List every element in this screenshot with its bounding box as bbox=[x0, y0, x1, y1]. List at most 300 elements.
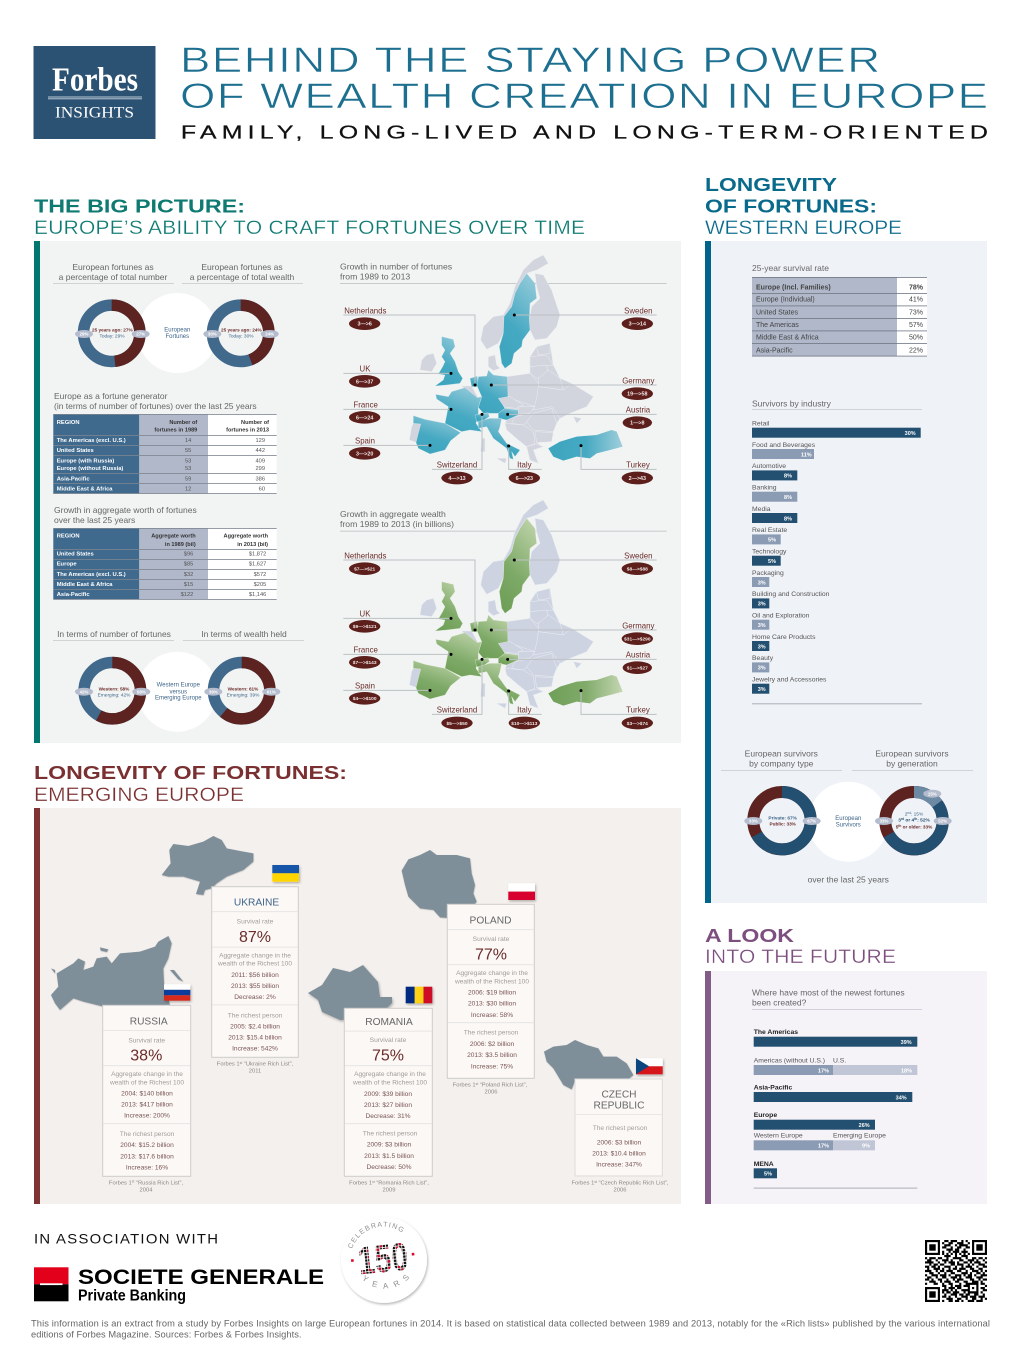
badge: celebrating 150 years: 150 bbox=[356, 1235, 410, 1283]
table: survival rate: 25-year survival rate bbox=[752, 263, 829, 273]
card: Romania: Survival rate bbox=[370, 1037, 407, 1044]
heading: a look into the future: A LOOK bbox=[705, 925, 795, 946]
map: growth in aggregate wealth: UK bbox=[360, 609, 371, 618]
table: fortune generator: 442 bbox=[256, 448, 265, 454]
map: growth in number of fortunes bbox=[340, 255, 667, 484]
badge: celebrating 150 years: YEARS bbox=[364, 1274, 409, 1289]
donut pair: Western vs Emerging: 39% bbox=[209, 689, 218, 694]
card: Poland: 2006: $19 billion bbox=[468, 990, 516, 997]
footer note bbox=[31, 1319, 990, 1340]
donut pair: European fortunes: 30% bbox=[208, 332, 217, 337]
card: Russia bbox=[103, 1005, 191, 1176]
donut pair: survivors: rd bbox=[901, 817, 904, 821]
map: growth in number of fortunes: UK bbox=[360, 364, 371, 373]
map: growth in aggregate wealth: from 1989 to 2013 (in billions) bbox=[340, 519, 454, 529]
bar chart: newest fortunes: been created? bbox=[752, 998, 807, 1008]
donut headings: European fortunes: a percentage of total number bbox=[59, 272, 168, 282]
bar chart: survivors by industry: 5% bbox=[768, 559, 776, 565]
flag: Romania bbox=[406, 987, 432, 1003]
logo: Forbes Insights: Forbes bbox=[52, 62, 138, 98]
bar chart: newest fortunes bbox=[752, 988, 922, 1189]
map: growth in number of fortunes: Sweden bbox=[624, 306, 652, 315]
map: growth in aggregate wealth: $7—>$21 bbox=[354, 566, 376, 572]
map: growth in aggregate wealth: $4—>$100 bbox=[353, 696, 377, 702]
donut headings: survivors: European survivors bbox=[745, 748, 818, 758]
map: Russia bbox=[51, 936, 183, 1010]
note: over the last 25 years: over the last 25 years bbox=[808, 874, 889, 884]
map: growth in number of fortunes: Germany bbox=[622, 376, 655, 385]
donut pair: survivors: 33% bbox=[749, 819, 758, 824]
bar chart: survivors by industry: 3% bbox=[758, 687, 766, 693]
heading: the big picture bbox=[34, 196, 585, 239]
label: in association with: IN ASSOCIATION WITH bbox=[34, 1232, 218, 1247]
table: fortune generator: 14 bbox=[185, 438, 191, 444]
card: Romania: The richest person bbox=[363, 1131, 418, 1138]
table: aggregate worth: Aggregate worth bbox=[224, 534, 269, 540]
donut pair: Western vs Emerging: 61% bbox=[267, 689, 276, 694]
table: aggregate worth: United States bbox=[57, 552, 94, 558]
table: fortune generator: Asia-Pacific bbox=[57, 476, 90, 482]
donut pair: survivors: 5 bbox=[896, 824, 898, 829]
map: growth in number of fortunes: France bbox=[353, 400, 378, 409]
map: growth in aggregate wealth: $5—>$50 bbox=[446, 721, 468, 727]
heading: aggregate worth: over the last 25 years bbox=[54, 515, 135, 525]
donut pair: survivors: nd bbox=[907, 811, 911, 815]
table: aggregate worth: Europe bbox=[57, 562, 77, 568]
bar chart: survivors by industry: Technology bbox=[752, 548, 787, 556]
donut pair: European fortunes: 29% bbox=[80, 332, 88, 337]
donut pair: survivors: Public: 33% bbox=[770, 822, 797, 827]
heading: aggregate worth bbox=[54, 505, 197, 525]
source: Russia: “Russia Rich List”, bbox=[134, 1180, 183, 1186]
bar chart: newest fortunes: 17% bbox=[818, 1068, 829, 1074]
table: fortune generator: Middle East & Africa bbox=[57, 486, 113, 492]
country: Russia bbox=[51, 936, 191, 1193]
donut pair: European fortunes: 25 years ago: 27% bbox=[92, 327, 133, 332]
card: Ukraine: Survival rate bbox=[237, 919, 274, 926]
map: growth in number of fortunes: 6—>23 bbox=[516, 476, 533, 482]
footer note: This information is an extract from a study by Forbes Insights on large European fortunes in 2014. It is based on statistical data collected between 1989 and 2013, notably for the «Rich lists» published by the various international bbox=[31, 1319, 990, 1329]
map: growth in aggregate wealth bbox=[340, 500, 667, 729]
footer note: editions of Forbes Magazine. Sources: Forbes & Forbes Insights. bbox=[31, 1330, 302, 1340]
logo: Forbes Insights bbox=[34, 46, 156, 139]
donut pair: Western vs Emerging: Emerging: 39% bbox=[227, 692, 260, 698]
table: fortune generator: 129 bbox=[256, 438, 265, 444]
table: fortune generator bbox=[53, 414, 277, 494]
table: fortune generator: 409 bbox=[256, 458, 265, 464]
card: Russia: Aggregate change in the bbox=[111, 1071, 183, 1078]
map: growth in aggregate wealth: Italy bbox=[517, 706, 532, 715]
table: aggregate worth bbox=[53, 528, 277, 600]
table: aggregate worth: in 1989 (bil) bbox=[165, 542, 196, 548]
table: fortune generator: fortunes in 2013 bbox=[226, 428, 269, 434]
table: aggregate worth: $1,872 bbox=[249, 552, 266, 558]
source: Russia: 2004 bbox=[140, 1187, 153, 1193]
donut headings: survivors bbox=[721, 748, 973, 771]
bar chart: survivors by industry: 3% bbox=[758, 602, 766, 608]
card: Poland: Survival rate bbox=[473, 936, 510, 943]
map: growth in aggregate wealth: Switzerland bbox=[437, 706, 477, 715]
map: growth in number of fortunes: Growth in number of fortunes bbox=[340, 261, 453, 271]
donut pair: Western vs Emerging: 42% bbox=[80, 689, 88, 694]
table: aggregate worth: $205 bbox=[254, 582, 266, 588]
heading: aggregate worth: Growth in aggregate worth of fortunes bbox=[54, 505, 197, 515]
card: Ukraine: 2013: $15.4 billion bbox=[228, 1035, 282, 1042]
source: Czech Republic: st bbox=[594, 1180, 597, 1184]
bar chart: newest fortunes: Americas (without U.S.) bbox=[754, 1057, 825, 1064]
card: Russia: 2004: $140 billion bbox=[121, 1091, 173, 1098]
card: Poland: Aggregate change in the bbox=[456, 970, 528, 977]
donut headings: survivors: by company type bbox=[749, 758, 814, 768]
donut headings: European fortunes: European fortunes as bbox=[201, 262, 283, 272]
heading: the big picture: EUROPE’S ABILITY TO CRAFT FORTUNES OVER TIME bbox=[34, 218, 585, 239]
bar chart: survivors by industry bbox=[752, 398, 922, 704]
map: growth in number of fortunes: 6—>37 bbox=[356, 379, 373, 385]
card: Ukraine: Decrease: 2% bbox=[234, 994, 276, 1001]
donut pair: survivors: 3 bbox=[898, 819, 901, 824]
source: Romania: st bbox=[372, 1180, 375, 1184]
table: aggregate worth: in 2013 (bil) bbox=[237, 542, 268, 548]
donut pair: survivors: th bbox=[898, 824, 901, 828]
table: survival rate: 73% bbox=[909, 309, 923, 316]
map: Romania bbox=[308, 965, 392, 1020]
table: aggregate worth: $32 bbox=[184, 572, 193, 578]
card: Ukraine: The richest person bbox=[228, 1012, 283, 1019]
bar chart: newest fortunes: 5% bbox=[764, 1172, 772, 1178]
card: Russia: wealth of the Richest 100 bbox=[109, 1079, 184, 1086]
country: Czech Republic bbox=[544, 1040, 669, 1194]
source: Ukraine: Forbes 1 bbox=[217, 1062, 240, 1068]
source: Czech Republic: “Czech Republic Rich List”, bbox=[597, 1181, 669, 1187]
card: Romania: 2013: $27 billion bbox=[364, 1102, 412, 1109]
heading: the big picture: THE BIG PICTURE: bbox=[34, 196, 245, 216]
card: Romania: Aggregate change in the bbox=[354, 1071, 426, 1078]
map: growth in number of fortunes: Netherlands bbox=[344, 306, 387, 315]
donut pair: Western vs Emerging: Emerging Europe bbox=[155, 695, 202, 701]
table: aggregate worth: Asia-Pacific bbox=[57, 592, 90, 598]
donut pair: European fortunes: 27% bbox=[136, 332, 145, 337]
bar chart: survivors by industry: Beauty bbox=[752, 655, 774, 662]
card: Russia: 38% bbox=[130, 1048, 162, 1065]
bar chart: newest fortunes: Where have most of the newest fortunes bbox=[752, 988, 905, 998]
card: Czech Republic: The richest person bbox=[593, 1125, 648, 1132]
map: growth in number of fortunes: Austria bbox=[626, 406, 651, 415]
map: Czech Republic bbox=[544, 1040, 633, 1089]
card: Russia: Increase: 16% bbox=[126, 1164, 168, 1171]
bar chart: survivors by industry: 5% bbox=[768, 538, 776, 544]
map: growth in aggregate wealth: $8—>$88 bbox=[627, 566, 648, 572]
table: fortune generator: 53 bbox=[185, 458, 191, 464]
map: growth in aggregate wealth: $7—>$143 bbox=[353, 660, 377, 666]
card: Romania: Decrease: 50% bbox=[366, 1164, 412, 1171]
card: Poland: 2006: $2 billion bbox=[470, 1041, 515, 1048]
table: aggregate worth: $572 bbox=[254, 572, 266, 578]
donut pair: survivors: Private: 67% bbox=[768, 815, 798, 821]
table: fortune generator: The Americas (excl. U.S.) bbox=[57, 438, 126, 444]
card: Russia: 2004: $15.2 billion bbox=[120, 1142, 174, 1149]
table: aggregate worth: $1,627 bbox=[249, 562, 266, 568]
bar chart: survivors by industry: Media bbox=[752, 506, 771, 513]
donut pair: survivors: 52% bbox=[938, 819, 947, 824]
donut pair: Western vs Emerging: 58% bbox=[137, 689, 146, 694]
table: aggregate worth: Middle East & Africa bbox=[57, 582, 113, 588]
table: fortune generator: United States bbox=[57, 448, 94, 454]
table: aggregate worth: $1,146 bbox=[249, 592, 266, 598]
source: Ukraine: st bbox=[240, 1061, 242, 1065]
table: aggregate worth: $15 bbox=[184, 582, 193, 588]
table: fortune generator: 299 bbox=[256, 466, 265, 472]
card: Poland: The richest person bbox=[464, 1030, 519, 1037]
card: Poland: Increase: 58% bbox=[471, 1012, 513, 1019]
map: growth in number of fortunes: 4—>13 bbox=[448, 476, 466, 482]
source: Romania: Forbes 1 bbox=[349, 1181, 372, 1187]
country: Poland bbox=[402, 850, 535, 1096]
donut pair: survivors: or 4 bbox=[904, 818, 915, 824]
table: fortune generator: 386 bbox=[256, 476, 265, 482]
card: Poland: 77% bbox=[475, 946, 507, 964]
bar chart: survivors by industry: 8% bbox=[784, 516, 792, 522]
bar chart: survivors by industry: 11% bbox=[801, 452, 812, 458]
table: survival rate: Europe (Individual) bbox=[756, 297, 815, 304]
heading: a look into the future bbox=[705, 925, 896, 968]
card: Romania: 2009: $39 billion bbox=[364, 1091, 412, 1098]
table: survival rate: Europe (Incl. Families) bbox=[756, 284, 831, 291]
source: Ukraine: 2011 bbox=[249, 1069, 261, 1075]
card: Czech Republic: 2013: $10.4 billion bbox=[592, 1150, 646, 1157]
card: Romania: wealth of the Richest 100 bbox=[352, 1079, 427, 1086]
donut pair: European fortunes bbox=[75, 293, 279, 373]
card: Czech Republic: Increase: 347% bbox=[596, 1162, 642, 1169]
table: fortune generator: 60 bbox=[259, 486, 265, 492]
bar chart: survivors by industry: Jewelry and Accessories bbox=[752, 676, 827, 684]
bar chart: survivors by industry: Home Care Products bbox=[752, 634, 816, 641]
heading: longevity emerging Europe bbox=[34, 762, 347, 806]
bar chart: newest fortunes: 26% bbox=[859, 1123, 870, 1129]
map: growth in number of fortunes: 6—>24 bbox=[356, 415, 373, 421]
donut pair: survivors: th bbox=[914, 817, 917, 821]
map: growth in number of fortunes: 19—>58 bbox=[627, 392, 648, 398]
panel: a look into the future bbox=[705, 971, 987, 1204]
table: fortune generator: REGION bbox=[57, 420, 80, 426]
source: Poland: st bbox=[476, 1082, 478, 1086]
donut pair: European fortunes: Today: 30% bbox=[228, 333, 254, 339]
bar chart: survivors by industry: Real Estate bbox=[752, 527, 787, 534]
bar chart: newest fortunes: 17% bbox=[818, 1144, 829, 1150]
table: fortune generator: Europe (without Russia) bbox=[57, 466, 123, 472]
map: Poland bbox=[402, 850, 477, 918]
donut pair: European fortunes: 25 years ago: 24% bbox=[221, 327, 262, 332]
source: Poland: “Poland Rich List”, bbox=[478, 1083, 528, 1089]
map: growth in aggregate wealth: Germany bbox=[622, 621, 655, 630]
donut headings: European fortunes: a percentage of total wealth bbox=[190, 272, 294, 282]
table: fortune generator: Europe (with Russia) bbox=[57, 458, 114, 464]
map: growth in aggregate wealth: Turkey bbox=[626, 706, 650, 715]
map: growth in number of fortunes: 1—>8 bbox=[630, 421, 645, 427]
donut pair: Western vs Emerging: Western: 61% bbox=[228, 686, 259, 691]
bar chart: survivors by industry: 3% bbox=[758, 644, 766, 650]
bar chart: newest fortunes: 9% bbox=[862, 1144, 870, 1150]
donut pair: survivors: 15% bbox=[928, 791, 937, 796]
table: fortune generator: Number of bbox=[169, 420, 197, 426]
table: survival rate bbox=[752, 263, 927, 356]
bar chart: survivors by industry: 3% bbox=[758, 666, 766, 672]
card: Romania: 2009: $3 billion bbox=[367, 1142, 412, 1149]
table: aggregate worth: The Americas (excl. U.S.) bbox=[57, 572, 126, 578]
table: survival rate: 78% bbox=[909, 284, 924, 291]
bar chart: newest fortunes: The Americas bbox=[754, 1029, 798, 1036]
map: Ukraine bbox=[162, 836, 253, 895]
card: Russia: 2013: $17.6 billion bbox=[120, 1153, 174, 1160]
card: Russia: Increase: 200% bbox=[124, 1113, 170, 1120]
card: Ukraine: 87% bbox=[239, 929, 271, 946]
panel: longevity western Europe bbox=[705, 241, 987, 903]
logo: Societe Generale: Private Banking bbox=[78, 1288, 186, 1304]
bar chart: newest fortunes: 18% bbox=[901, 1068, 912, 1074]
card: Romania: 75% bbox=[372, 1048, 404, 1064]
donut pair: survivors: European bbox=[835, 816, 861, 822]
table: survival rate: 50% bbox=[909, 335, 923, 342]
logo: Societe Generale: SOCIETE GENERALE bbox=[78, 1266, 324, 1289]
bar chart: newest fortunes: 34% bbox=[896, 1095, 907, 1101]
card: Ukraine: UKRAINE bbox=[234, 898, 279, 909]
card: Ukraine: Aggregate change in the bbox=[219, 952, 291, 959]
donut pair: Western vs Emerging: versus bbox=[169, 689, 187, 695]
table: fortune generator: 59 bbox=[185, 476, 191, 482]
bar chart: survivors by industry: Building and Construction bbox=[752, 591, 830, 598]
badge: celebrating 150 years bbox=[340, 1220, 430, 1306]
bar chart: newest fortunes: Asia-Pacific bbox=[754, 1084, 792, 1091]
donut pair: survivors: Survivors bbox=[836, 822, 861, 828]
country: Ukraine bbox=[162, 836, 299, 1075]
map: growth in number of fortunes: 2—>43 bbox=[629, 476, 646, 482]
bar chart: survivors by industry: 8% bbox=[784, 474, 792, 480]
donut pair: survivors: 33% bbox=[880, 819, 888, 824]
table: survival rate: United States bbox=[756, 309, 799, 316]
table: aggregate worth: REGION bbox=[57, 534, 80, 540]
card: Poland: 2013: $30 billion bbox=[468, 1001, 516, 1008]
bar chart: survivors by industry: Packaging bbox=[752, 570, 784, 577]
donut headings: European fortunes bbox=[53, 262, 303, 284]
donut headings: Western vs Emerging bbox=[53, 629, 304, 641]
card: Czech Republic: CZECH bbox=[601, 1090, 637, 1101]
source: Russia: Forbes 1 bbox=[109, 1180, 132, 1186]
bar chart: newest fortunes: MENA bbox=[754, 1161, 774, 1168]
map: growth in aggregate wealth: Growth in aggregate wealth bbox=[340, 509, 446, 519]
card: Ukraine bbox=[212, 887, 298, 1057]
map: growth in aggregate wealth: Spain bbox=[355, 681, 375, 690]
source: Russia: st bbox=[132, 1180, 134, 1184]
card: Romania: Decrease: 31% bbox=[365, 1113, 411, 1120]
table: survival rate: 57% bbox=[909, 322, 923, 329]
table: survival rate: Middle East & Africa bbox=[756, 335, 819, 342]
source: Ukraine: “Ukraine Rich List”, bbox=[242, 1062, 294, 1068]
donut headings: survivors: by generation bbox=[886, 758, 938, 768]
flag: Russia bbox=[164, 984, 190, 1001]
donut pair: Western vs Emerging: Western: 58% bbox=[99, 686, 130, 691]
card: Russia: The richest person bbox=[120, 1131, 175, 1138]
card: Russia: 2013: $417 billion bbox=[121, 1102, 173, 1109]
donut headings: European fortunes: European fortunes as bbox=[72, 262, 154, 272]
bar chart: newest fortunes: U.S. bbox=[833, 1057, 846, 1064]
title bbox=[180, 40, 988, 116]
donut pair: survivors: 2 bbox=[905, 813, 907, 818]
flag: Ukraine bbox=[272, 865, 299, 882]
bar chart: survivors by industry: 3% bbox=[758, 623, 766, 629]
donut headings: Western vs Emerging: In terms of wealth held bbox=[201, 629, 287, 639]
heading: fortune generator: Europe as a fortune generator bbox=[54, 391, 168, 401]
icon: QR code bbox=[925, 1241, 987, 1301]
map: growth in aggregate wealth: $3—>$74 bbox=[627, 721, 648, 727]
bar chart: survivors by industry: Banking bbox=[752, 484, 777, 492]
card: Russia: RUSSIA bbox=[130, 1016, 168, 1027]
heading: longevity western Europe: WESTERN EUROPE bbox=[705, 218, 902, 239]
heading: longevity western Europe: OF FORTUNES: bbox=[705, 196, 877, 216]
badge: celebrating 150 years: 150 bbox=[356, 1235, 410, 1283]
card: Romania bbox=[344, 1008, 432, 1176]
card: Czech Republic: REPUBLIC bbox=[594, 1100, 644, 1111]
map: growth in aggregate wealth: $1—>$27 bbox=[627, 665, 648, 671]
card: Poland: wealth of the Richest 100 bbox=[454, 978, 529, 985]
card: Ukraine: 2005: $2.4 billion bbox=[230, 1023, 280, 1030]
map: growth in number of fortunes: Italy bbox=[517, 461, 532, 470]
donut pair: survivors: : 52% bbox=[917, 818, 931, 824]
card: Russia: Survival rate bbox=[128, 1037, 165, 1044]
map: growth in number of fortunes: Switzerland bbox=[437, 461, 477, 470]
bar chart: survivors by industry: Automotive bbox=[752, 463, 786, 470]
bar chart: newest fortunes: Emerging Europe bbox=[833, 1133, 886, 1140]
table: survival rate: Asia-Pacific bbox=[756, 347, 793, 354]
card: Poland: POLAND bbox=[470, 915, 511, 926]
map: growth in number of fortunes: 3—>14 bbox=[629, 322, 646, 328]
bar chart: survivors by industry: Retail bbox=[752, 420, 770, 428]
map: growth in aggregate wealth: Austria bbox=[626, 651, 651, 660]
table: fortune generator: fortunes in 1989 bbox=[154, 428, 197, 434]
bar chart: survivors by industry: 3% bbox=[758, 580, 766, 586]
table: fortune generator: Number of bbox=[241, 420, 269, 426]
heading: fortune generator bbox=[54, 391, 257, 411]
bar chart: survivors by industry: 8% bbox=[784, 495, 792, 501]
map: growth in number of fortunes: 3—>6 bbox=[357, 322, 372, 328]
bar chart: newest fortunes: 39% bbox=[901, 1040, 912, 1046]
logo: Forbes Insights: INSIGHTS bbox=[55, 104, 134, 121]
table: fortune generator: 12 bbox=[185, 486, 191, 492]
heading: a look into the future: INTO THE FUTURE bbox=[705, 947, 896, 968]
donut headings: Western vs Emerging: In terms of number of fortunes bbox=[57, 629, 171, 639]
table: survival rate: 22% bbox=[909, 347, 923, 354]
source: Czech Republic: Forbes 1 bbox=[571, 1181, 594, 1187]
source: Romania: “Romania Rich List”, bbox=[375, 1181, 429, 1187]
heading: fortune generator: (in terms of number of fortunes) over the last 25 years bbox=[54, 401, 257, 411]
donut pair: European fortunes: Fortunes bbox=[165, 334, 189, 340]
bar chart: newest fortunes: Europe bbox=[754, 1112, 777, 1119]
donut pair: Western vs Emerging bbox=[75, 652, 280, 732]
badge: celebrating 150 years: CELEBRATING bbox=[348, 1222, 404, 1248]
country: Romania bbox=[308, 965, 432, 1194]
table: fortune generator: 53 bbox=[185, 466, 191, 472]
bar chart: survivors by industry: 30% bbox=[905, 431, 916, 437]
table: fortune generator: 55 bbox=[185, 448, 191, 454]
map: growth in aggregate wealth: Netherlands bbox=[344, 551, 387, 560]
subtitle: FAMILY, LONG-LIVED AND LONG-TERM-ORIENTED bbox=[181, 122, 988, 143]
map: growth in aggregate wealth: France bbox=[353, 645, 378, 654]
heading: longevity western Europe: LONGEVITY bbox=[705, 174, 838, 195]
card: Poland: Increase: 75% bbox=[471, 1063, 513, 1070]
flag: Czech Republic bbox=[636, 1058, 663, 1074]
map: growth in aggregate wealth: $10—>$113 bbox=[511, 721, 538, 727]
bar chart: newest fortunes: Western Europe bbox=[754, 1133, 803, 1140]
source: Czech Republic: 2006 bbox=[614, 1188, 626, 1194]
card: Romania: 2013: $1.5 billion bbox=[364, 1153, 414, 1160]
